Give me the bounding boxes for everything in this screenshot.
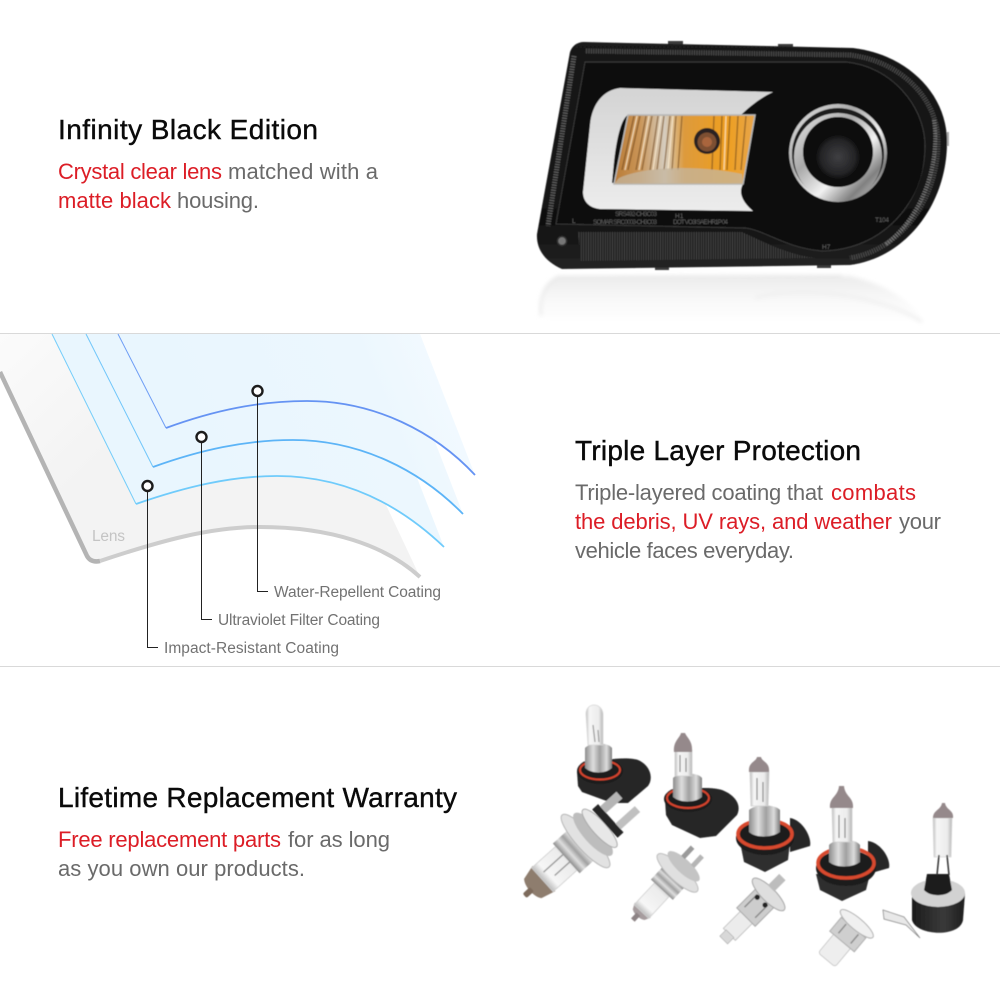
text block: warranty description: as you own our products. — [58, 856, 305, 881]
divider — [0, 333, 1000, 334]
heading: infinity black edition: Infinity Black Edition — [58, 114, 318, 145]
bulb: clear-top 9006 — [577, 705, 651, 803]
callout: impact-resistant coating: Impact-Resistant Coating — [164, 640, 339, 657]
bulb: 880 — [911, 803, 965, 933]
LED light bar — [583, 88, 773, 211]
housing part number markings: SOMAR SRC0003-CH3C03 — [593, 219, 657, 226]
text block: warranty description: Free replacement parts — [58, 827, 281, 852]
divider — [0, 666, 1000, 667]
text block: crystal clear lens description: matched with a — [228, 159, 379, 184]
callout: water-repellent coating: Water-Repellent Coating — [274, 584, 441, 601]
bulb: gray-cap 9006 — [664, 733, 739, 838]
chrome dotted bezel — [586, 51, 938, 258]
mounting tabs — [655, 41, 949, 270]
panel: infinity black edition text — [58, 114, 379, 213]
housing part number markings: H1 — [675, 213, 684, 220]
lower grille — [578, 232, 815, 261]
diagram: triple layer lens coating — [0, 334, 475, 657]
impact-resistant coating layer — [52, 334, 444, 547]
housing part number markings: L — [572, 218, 576, 225]
bulb: H11 left — [736, 757, 810, 872]
callout: ultraviolet filter coating — [196, 432, 380, 629]
bulb: H11 right — [816, 786, 889, 901]
text block: coating description — [575, 480, 941, 563]
text block: coating description: Triple-layered coating that — [575, 480, 823, 505]
text block: crystal clear lens description: housing. — [177, 188, 259, 213]
panel: triple layer protection text — [575, 435, 941, 563]
text block: coating description: vehicle faces everyday. — [575, 538, 794, 563]
bulb: H4 — [501, 775, 654, 922]
lens layer — [0, 334, 420, 577]
text block: warranty description — [58, 827, 390, 881]
text block: coating description: combats — [831, 480, 916, 505]
text block: coating description: the debris, UV rays, and weather — [575, 509, 892, 534]
housing part number markings: T104 — [875, 217, 889, 224]
housing part number markings: DOT VO3I SAE HR1P 04 — [673, 219, 728, 226]
housing part number markings — [572, 211, 889, 251]
heading: lifetime replacement warranty: Lifetime Replacement Warranty — [58, 782, 457, 813]
callout: impact-resistant coating — [142, 481, 339, 657]
lens label: Lens — [92, 528, 125, 545]
text block: crystal clear lens description: matte black — [58, 188, 172, 213]
callout: ultraviolet filter coating: Ultraviolet Filter Coating — [218, 612, 380, 629]
bulb: H3 wire — [883, 910, 920, 938]
illustration: replacement bulbs — [501, 705, 965, 973]
chrome projector ring — [789, 104, 887, 202]
housing outer shell — [537, 42, 947, 269]
panel: lifetime replacement warranty text — [58, 782, 457, 881]
illustration: black projector headlight — [537, 41, 949, 322]
text block: coating description: your — [899, 509, 941, 534]
text block: warranty description: for as long — [288, 827, 390, 852]
water-repellent coating layer — [118, 334, 475, 475]
reflection under headlight — [540, 276, 925, 322]
text block: crystal clear lens description: Crystal clear lens — [58, 159, 222, 184]
text block: crystal clear lens description — [58, 159, 379, 213]
bulb: H1 — [708, 863, 800, 955]
inner black housing — [556, 62, 925, 251]
amber turn signal lens — [614, 115, 755, 184]
bulb: H7 — [613, 833, 717, 939]
bulb: H3 — [810, 906, 877, 973]
housing part number markings: SRS492-CH3C03 — [615, 211, 657, 218]
callout: water-repellent coating — [252, 386, 441, 601]
ultraviolet filter coating layer — [86, 334, 463, 514]
projector recess — [748, 65, 924, 241]
heading: triple layer protection: Triple Layer Protection — [575, 435, 861, 466]
housing part number markings: H7 — [822, 244, 831, 251]
adjuster screw — [558, 236, 566, 246]
